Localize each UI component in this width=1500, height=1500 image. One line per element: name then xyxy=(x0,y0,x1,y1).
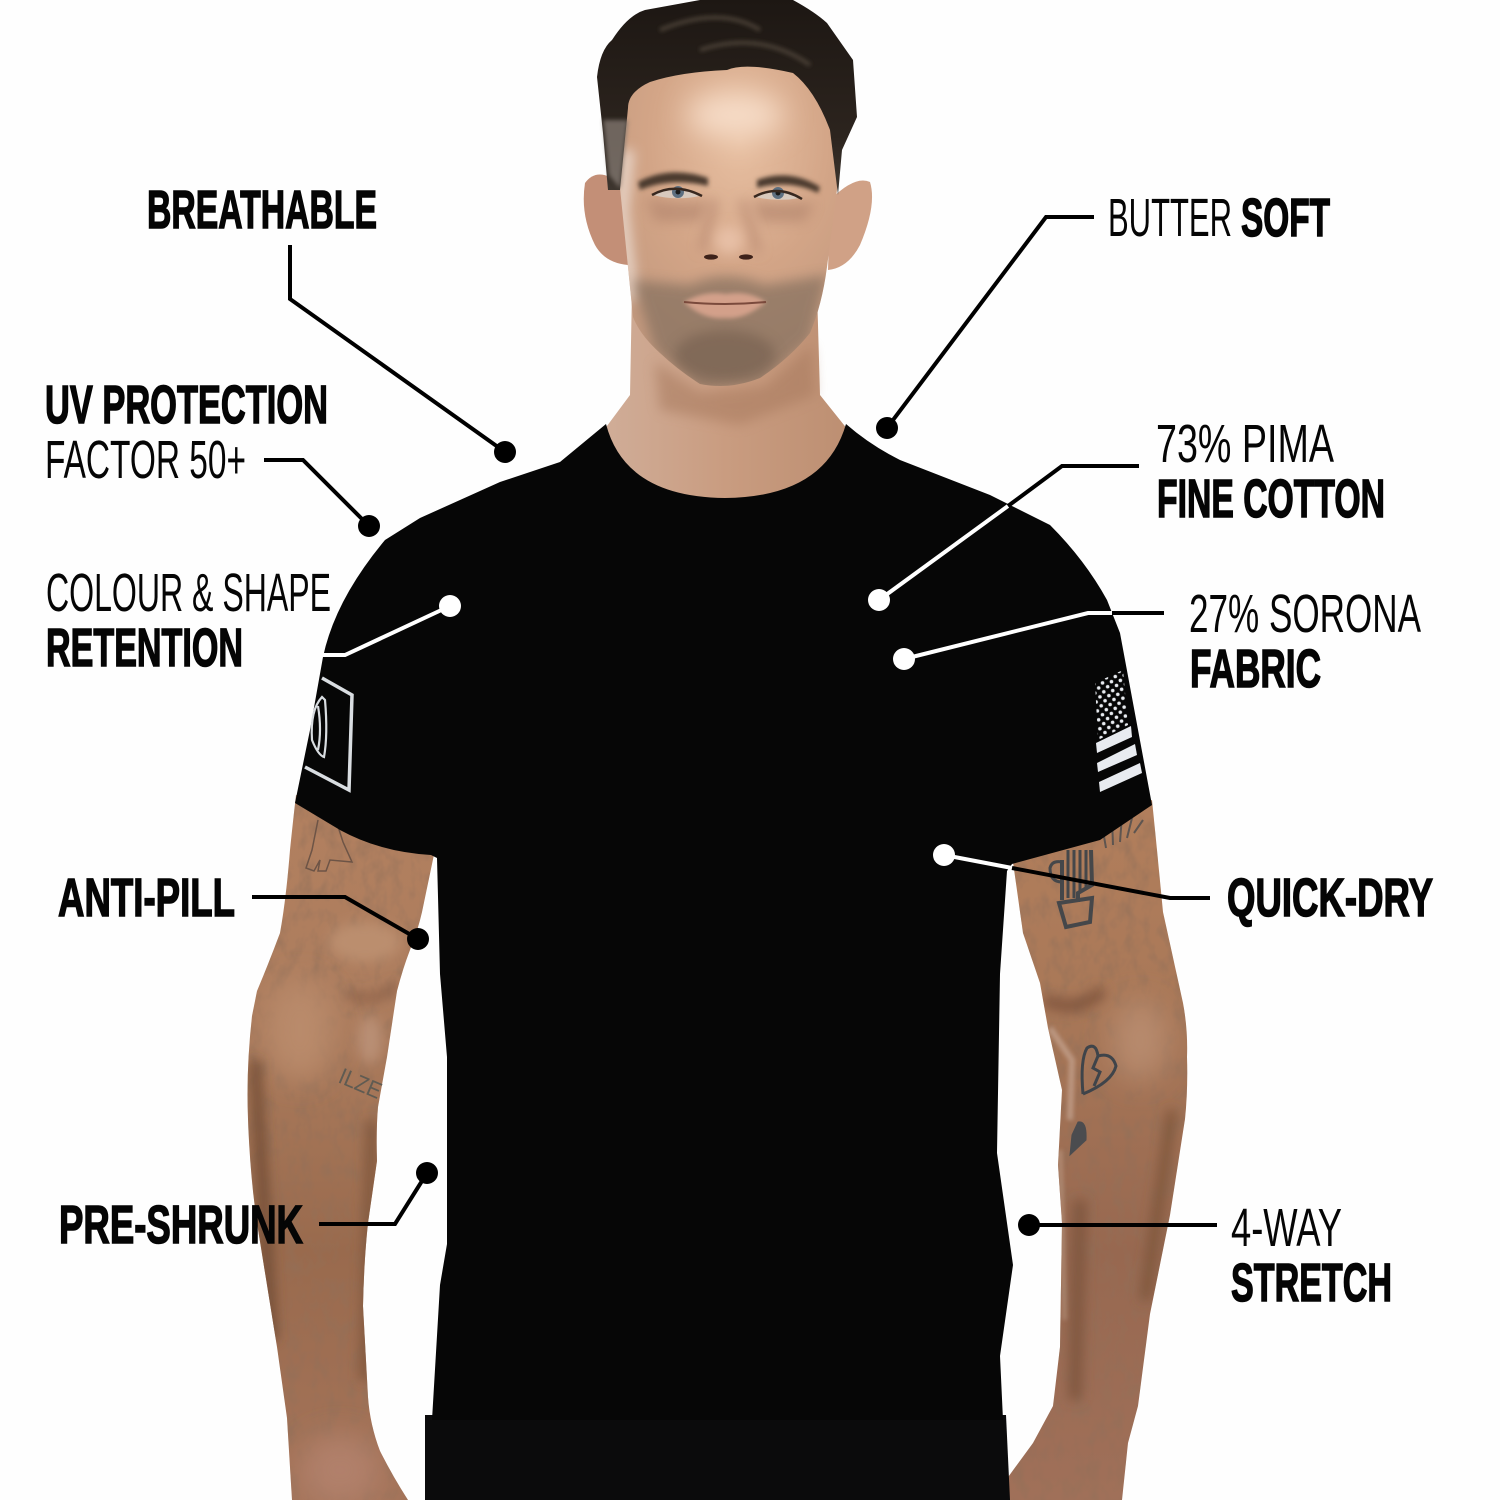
neck xyxy=(604,290,848,505)
eye right xyxy=(754,187,802,200)
left sleeve patch xyxy=(305,678,352,790)
callout: colour and shape retention xyxy=(46,563,461,678)
right sleeve flag xyxy=(1095,670,1142,792)
tattoo: cactus xyxy=(1050,850,1092,927)
eyebrow right xyxy=(757,175,820,193)
tattoo: broken heart xyxy=(1082,1046,1116,1094)
tattoo: hand xyxy=(306,820,352,871)
tattoo: sunburst xyxy=(1102,815,1143,848)
callout: uv protection xyxy=(45,375,380,537)
tattoo: small mark xyxy=(1070,1122,1086,1155)
nose xyxy=(704,226,753,260)
forehead highlight xyxy=(687,93,783,137)
callout: sorona fabric xyxy=(893,584,1421,699)
callout: sorona fabric: FABRIC xyxy=(1190,639,1321,699)
callout: pima fine cotton: 73% PIMA xyxy=(1156,414,1334,474)
right arm xyxy=(1000,790,1190,1500)
model wearing t-shirt xyxy=(240,0,1190,1500)
callout: butter soft: SOFT xyxy=(1241,188,1330,248)
left pale temple xyxy=(622,150,632,300)
callout: 4-way stretch: STRETCH xyxy=(1231,1253,1392,1313)
tattoo: ILZE: ILZE xyxy=(335,1063,386,1104)
eyebrow left xyxy=(638,172,708,190)
pants xyxy=(425,1415,1010,1500)
callout: anti-pill: ANTI-PILL xyxy=(58,868,235,928)
ear right xyxy=(828,180,872,270)
callout: quick-dry xyxy=(933,844,1433,928)
callout: breathable: BREATHABLE xyxy=(147,180,377,240)
callout: colour and shape retention: COLOUR & SHAPE xyxy=(46,563,331,623)
callout: 4-way stretch: 4-WAY xyxy=(1231,1198,1342,1258)
callout: uv protection: FACTOR 50+ xyxy=(45,430,246,490)
callout: uv protection: UV PROTECTION xyxy=(45,375,328,435)
goatee xyxy=(675,330,775,380)
neck shadow xyxy=(655,345,815,425)
callout: pre-shrunk: PRE-SHRUNK xyxy=(59,1195,303,1255)
mouth xyxy=(684,293,766,318)
callout: colour and shape retention: RETENTION xyxy=(46,618,243,678)
nose shading xyxy=(702,200,758,252)
callout: pima fine cotton xyxy=(868,414,1385,611)
callout: pre-shrunk xyxy=(59,1162,438,1255)
t-shirt xyxy=(295,424,1152,1420)
callout: anti-pill xyxy=(58,868,429,950)
left arm xyxy=(240,790,440,1500)
callout: 4-way stretch xyxy=(1018,1198,1392,1313)
callout: butter soft: BUTTER xyxy=(1108,188,1232,248)
face xyxy=(620,66,837,386)
hair highlights xyxy=(660,18,810,65)
grey temple xyxy=(603,120,628,188)
callout: butter soft xyxy=(876,188,1330,439)
eye sockets xyxy=(645,198,815,222)
eye left xyxy=(652,186,702,198)
callout: breathable xyxy=(147,180,516,463)
hair xyxy=(597,0,857,195)
beard xyxy=(632,275,828,390)
ear left xyxy=(584,174,628,265)
